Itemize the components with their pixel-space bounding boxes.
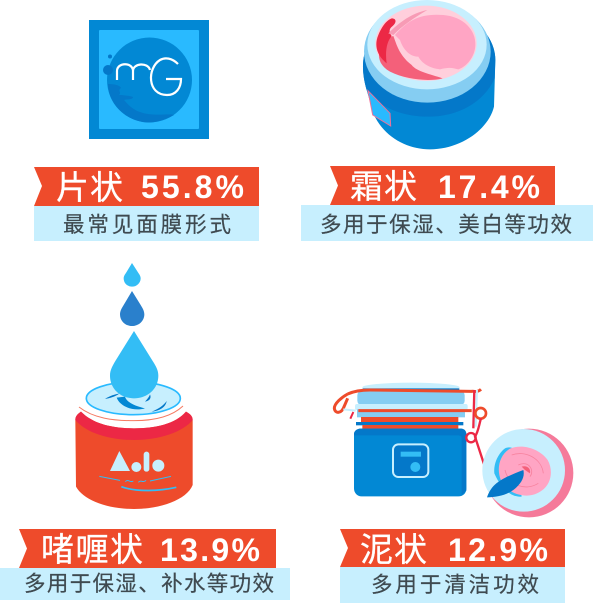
banner: 片状 55.8%: 55.8% (141, 169, 244, 205)
description: 最常见面膜形式 (34, 206, 259, 241)
banner: 啫喱状 13.9%: 13.9% (160, 532, 260, 568)
icon: gel jar with water drops (75, 263, 193, 509)
banner: 泥状 12.9%: 12.9% (448, 532, 548, 568)
panel: sheet mask (34, 20, 259, 241)
description: 最常见面膜形式: 最常见面膜形式 (63, 213, 231, 237)
description: 多用于清洁功效 (340, 567, 565, 603)
description: 多用于保湿、美白等功效: 多用于保湿、美白等功效 (320, 213, 572, 237)
description: 多用于清洁功效: 多用于清洁功效 (371, 573, 539, 597)
banner: 霜状 17.4%: 霜状 (350, 168, 417, 205)
banner: 霜状 17.4%: 17.4% (438, 169, 540, 205)
banner: 啫喱状 13.9% (19, 529, 276, 568)
panel: cream (301, 0, 593, 241)
icon: clip-top jar with mud dish (334, 383, 573, 517)
panel: gel (0, 263, 290, 600)
banner: 啫喱状 13.9%: 啫喱状 (41, 531, 143, 568)
banner: 片状 55.8%: 片状 (56, 169, 123, 206)
banner: 片状 55.8% (34, 167, 259, 206)
panel: mud (334, 383, 573, 603)
banner: 泥状 12.9%: 泥状 (360, 531, 427, 568)
icon: sheet mask packet (89, 20, 209, 139)
description: 多用于保湿、补水等功效 (0, 568, 290, 600)
banner: 泥状 12.9% (340, 529, 565, 568)
description: 多用于保湿、补水等功效: 多用于保湿、补水等功效 (24, 572, 274, 596)
banner: 霜状 17.4% (330, 166, 555, 205)
icon: cream jar (363, 0, 495, 149)
description: 多用于保湿、美白等功效 (301, 205, 593, 241)
